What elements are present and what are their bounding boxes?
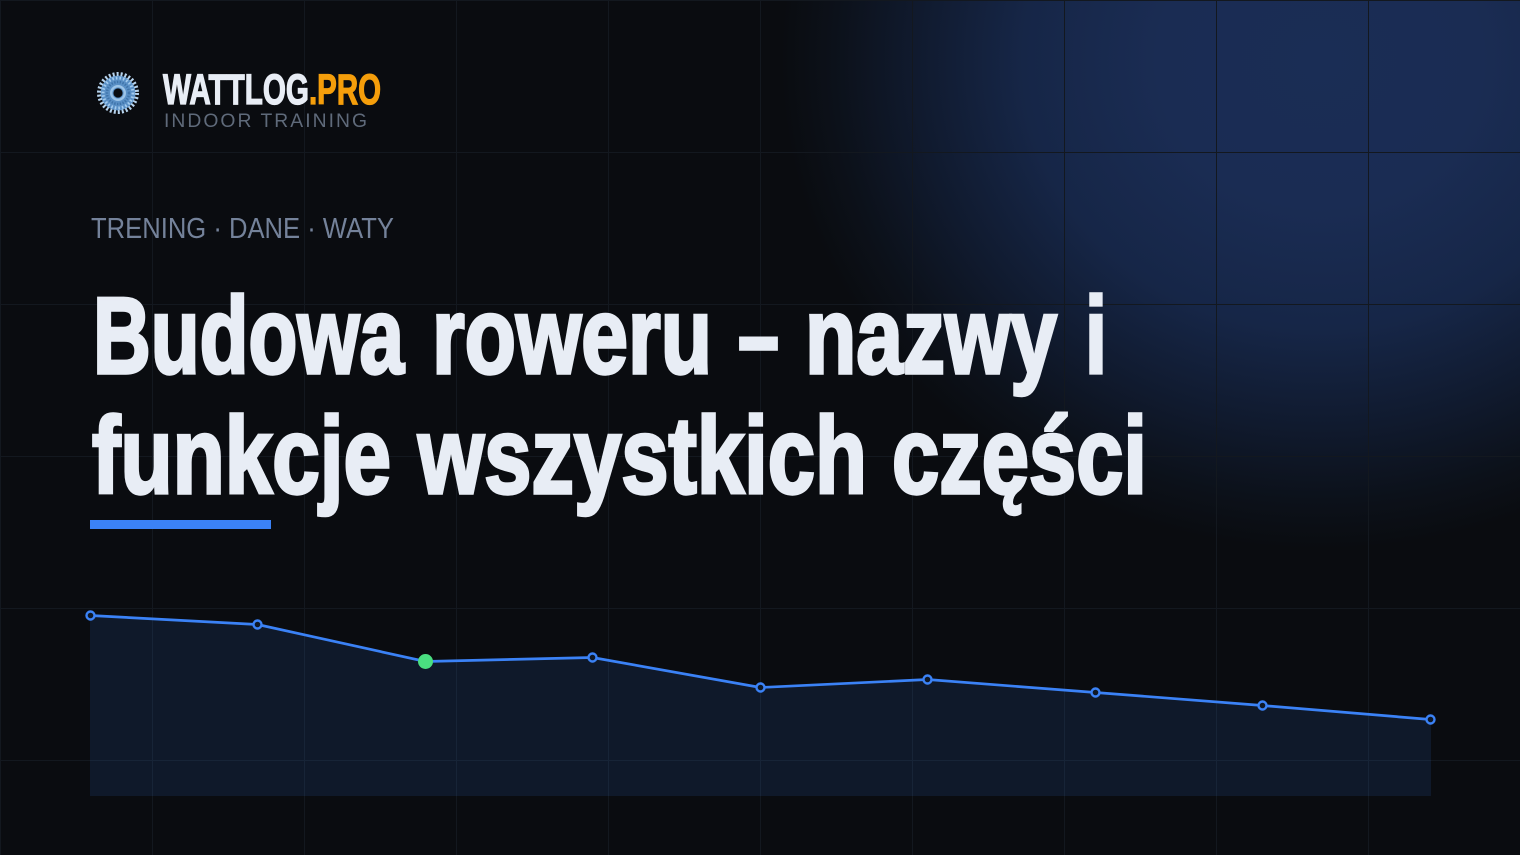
title: nazwy xyxy=(805,275,1057,397)
chart markers xyxy=(86,612,1434,724)
title xyxy=(92,275,1147,517)
title: i xyxy=(1085,275,1107,397)
icon: cassette cog xyxy=(99,74,137,112)
title underline xyxy=(90,520,271,529)
line chart xyxy=(86,612,1434,796)
logo wordmark: WATTLOG xyxy=(163,66,309,114)
title: części xyxy=(892,395,1147,517)
logo xyxy=(99,66,381,132)
eyebrow: TRENING · DANE · WATY xyxy=(91,213,394,245)
title: roweru xyxy=(432,275,712,397)
logo accent: .PRO xyxy=(309,66,381,114)
title: funkcje xyxy=(92,395,391,517)
title: – xyxy=(738,275,779,397)
chart area xyxy=(90,616,1431,796)
title: Budowa xyxy=(93,275,405,397)
title: wszystkich xyxy=(417,395,867,517)
highlighted marker xyxy=(418,654,433,669)
logo tagline: INDOOR TRAINING xyxy=(164,111,369,132)
chart line xyxy=(90,616,1430,720)
